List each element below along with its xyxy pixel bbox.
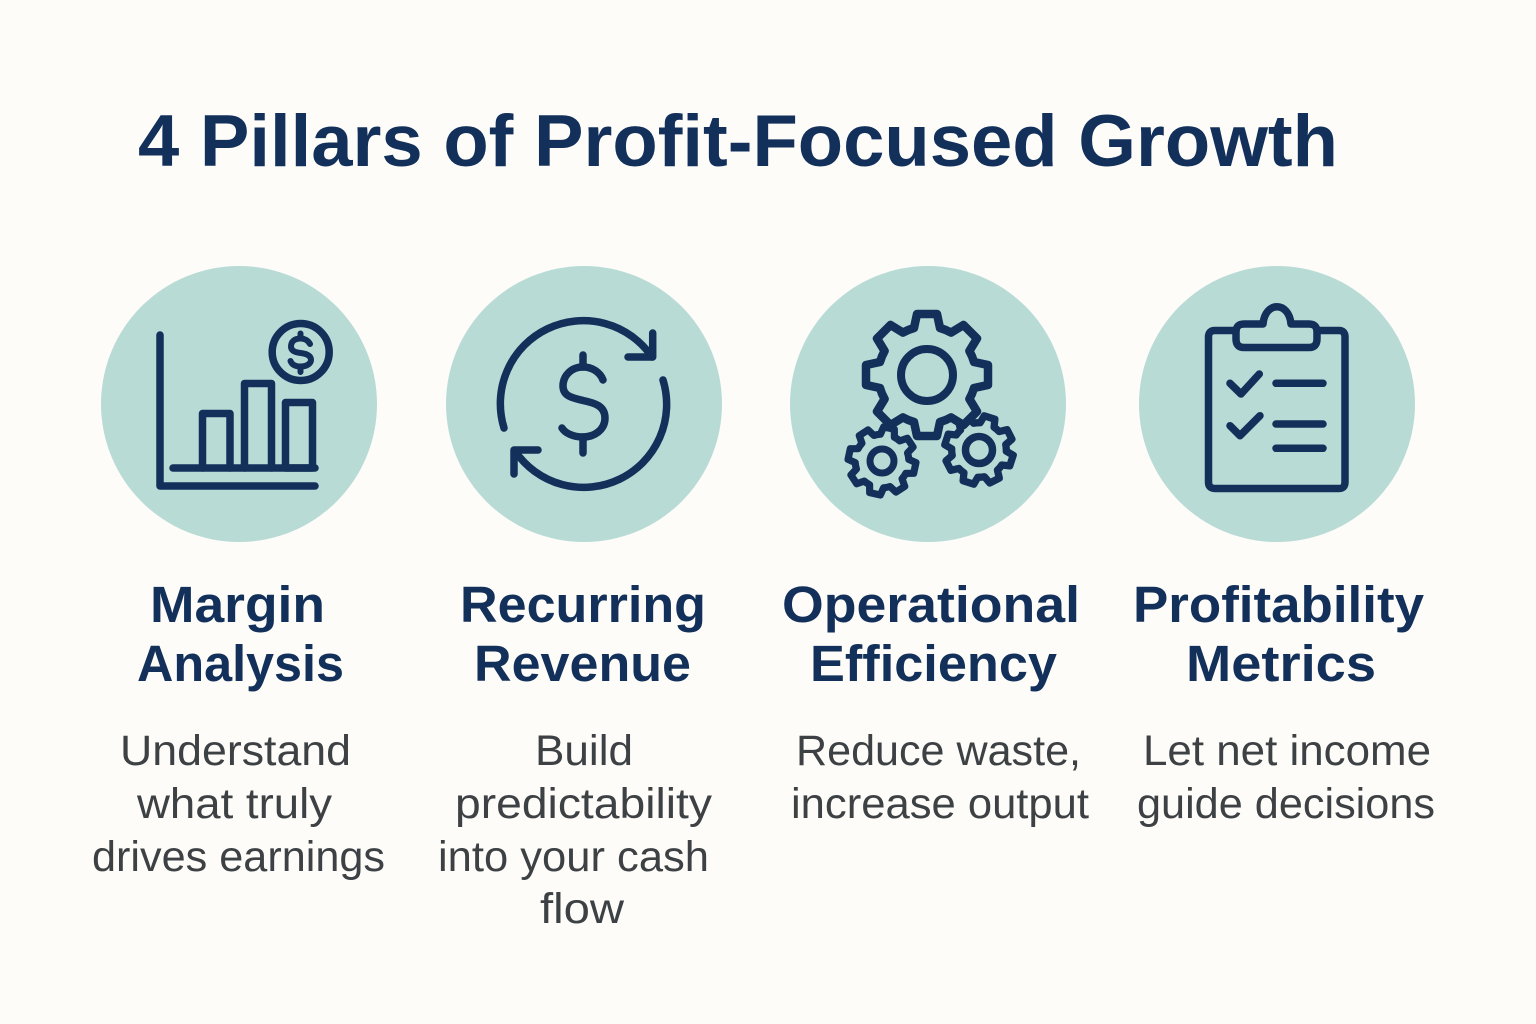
text: margin analysis description: drives earnings	[92, 833, 385, 881]
text: recurring revenue description	[438, 727, 713, 933]
heading: margin analysis	[137, 576, 344, 692]
heading: recurring revenue	[460, 576, 706, 692]
text: recurring revenue description: Build	[535, 727, 633, 775]
text: operational efficiency description: increase output	[791, 780, 1089, 828]
panel: recurring revenue	[438, 266, 722, 933]
panel: operational efficiency	[782, 266, 1089, 828]
text: profitability metrics description	[1137, 727, 1435, 828]
text: profitability metrics description: guide decisions	[1137, 780, 1435, 828]
heading: profitability metrics: Profitability	[1133, 576, 1425, 633]
panel: profitability metrics	[1133, 266, 1435, 828]
text: operational efficiency description: Reduce waste,	[796, 727, 1081, 775]
title: 4 Pillars of Profit-Focused Growth	[138, 101, 1338, 182]
heading: operational efficiency	[782, 576, 1080, 692]
icon: three gears	[842, 314, 1022, 501]
text: operational efficiency description	[791, 727, 1089, 828]
heading: operational efficiency: Efficiency	[810, 635, 1058, 692]
heading: recurring revenue: Recurring	[460, 576, 706, 633]
text: recurring revenue description: flow	[540, 885, 625, 933]
icon circle: operational efficiency	[790, 266, 1066, 542]
text: margin analysis description: Understand	[120, 727, 351, 775]
heading: operational efficiency: Operational	[782, 576, 1080, 633]
heading: margin analysis: Margin	[150, 576, 325, 633]
icon circle: profitability metrics	[1139, 266, 1415, 542]
icon: clipboard checklist	[1208, 307, 1345, 488]
panel: margin analysis	[92, 266, 385, 881]
icon circle: recurring revenue	[446, 266, 722, 542]
text: margin analysis description	[92, 727, 385, 881]
text: recurring revenue description: predictability	[455, 780, 713, 828]
heading: margin analysis: Analysis	[137, 635, 344, 692]
icon: bar chart with dollar coin	[160, 324, 329, 486]
heading: profitability metrics	[1133, 576, 1425, 692]
heading: profitability metrics: Metrics	[1186, 635, 1376, 692]
heading: recurring revenue: Revenue	[474, 635, 691, 692]
icon circle: margin analysis	[101, 266, 377, 542]
icon: circular arrows with dollar	[500, 321, 667, 487]
text: margin analysis description: what truly	[136, 780, 333, 828]
text: recurring revenue description: into your cash	[438, 833, 709, 881]
text: profitability metrics description: Let net income	[1143, 727, 1431, 775]
